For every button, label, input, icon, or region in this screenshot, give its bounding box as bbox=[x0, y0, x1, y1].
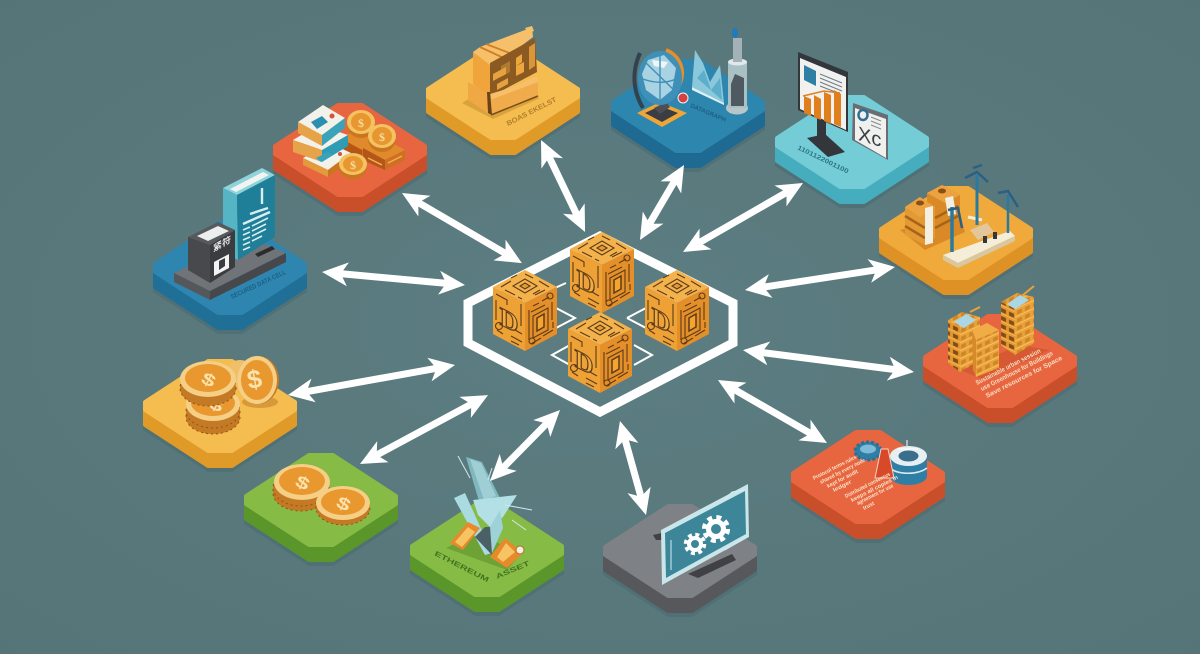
label: platform caption: BOAS EKELST bbox=[506, 96, 559, 128]
blockchain cube: top: D bbox=[577, 263, 595, 301]
panel: ledger book and terminal bbox=[153, 168, 307, 334]
arrow: documents to hub bbox=[712, 370, 833, 453]
arrow: vault to hub bbox=[530, 135, 596, 237]
icon: score card: Xc bbox=[858, 122, 881, 152]
icon: tower left bbox=[948, 307, 980, 372]
arrow: dashboard to hub bbox=[677, 173, 809, 262]
icon: gold coins: $ bbox=[350, 158, 356, 172]
icon: striped wheel bbox=[890, 440, 927, 485]
blockchain cube: bottom: D bbox=[575, 343, 593, 381]
icon: monitor with chart bbox=[798, 52, 848, 157]
label: platform text: kept for audit bbox=[826, 469, 859, 490]
icon: orange boxes bbox=[340, 128, 405, 170]
panel: globe and analytics bbox=[611, 28, 765, 172]
blockchain cube: left: D bbox=[500, 301, 518, 339]
arrow: broken glass to hub bbox=[481, 402, 569, 489]
label: platform text: use Greenhouse for Buildings bbox=[980, 350, 1054, 393]
arrow: two coins to hub bbox=[354, 385, 494, 475]
panel: wind energy and blocks bbox=[879, 165, 1033, 299]
icon: gold coins bbox=[339, 110, 396, 179]
icon: single coin bbox=[316, 486, 370, 525]
arrow: coin pile to hub bbox=[286, 353, 457, 407]
icon: score card bbox=[852, 103, 888, 160]
icon: single coin: $ bbox=[333, 493, 354, 516]
label: platform text: ledger bbox=[832, 479, 854, 494]
icon: stacked blocks bbox=[905, 185, 960, 245]
label: platform text: Sustainable urban session bbox=[975, 348, 1042, 387]
icon: terminal box bbox=[188, 222, 235, 283]
label: platform text: shared by every node bbox=[819, 458, 866, 486]
label: platform text: keeps all copies in bbox=[850, 475, 900, 504]
icon: gold coins: $ bbox=[379, 130, 385, 144]
icon: tower right bbox=[1001, 286, 1034, 355]
arrow: records to hub bbox=[396, 183, 528, 273]
icon: stacked books bbox=[293, 105, 351, 177]
icon: orange blocks bbox=[450, 522, 524, 568]
arrow: settings to hub bbox=[608, 418, 658, 518]
icon: tower middle bbox=[972, 323, 999, 377]
panel: dashboard monitor bbox=[775, 52, 929, 208]
label: platform text: agreement for use bbox=[856, 483, 895, 507]
arrow: globe to hub bbox=[630, 159, 694, 246]
icon: red cone bbox=[875, 449, 894, 478]
icon: orange block building bbox=[468, 26, 538, 115]
label: platform text: trust bbox=[862, 501, 876, 512]
label: platform text: Save resources for Space bbox=[985, 355, 1064, 400]
icon: test tube bbox=[726, 28, 748, 114]
blockchain cube: right: D bbox=[652, 301, 670, 339]
icon: blue gear bbox=[855, 442, 881, 460]
blockchain cube: top bbox=[570, 232, 634, 313]
panel: broken glass bbox=[410, 456, 564, 616]
blockchain cube: left bbox=[493, 270, 557, 351]
panel: vault building bbox=[426, 26, 580, 159]
icon: upper coin stack bbox=[180, 361, 236, 406]
arrow: terminal to hub bbox=[321, 260, 466, 297]
panel: coin pile bbox=[143, 356, 297, 472]
label: platform caption: ETHEREUM bbox=[433, 551, 490, 584]
panel: city buildings bbox=[923, 286, 1077, 427]
icon: lower coin stack: $ bbox=[206, 394, 227, 417]
label: platform caption small: ASSET bbox=[495, 560, 532, 581]
panel: settings screen bbox=[603, 484, 757, 617]
icon: terminal box: 紧符 bbox=[213, 234, 231, 255]
panel: documents and gears bbox=[791, 432, 945, 543]
icon: coin stack bbox=[273, 464, 330, 511]
label: platform text: Protocol terms rules bbox=[812, 455, 858, 482]
label: platform text: Distributed consensus bbox=[844, 472, 891, 500]
label: platform caption: SECURED DATA CELL bbox=[230, 269, 287, 301]
label: platform text bbox=[812, 455, 900, 512]
panel: two coins bbox=[244, 455, 398, 566]
arrow: wind energy to hub bbox=[743, 255, 897, 302]
icon: shattered crystal bbox=[454, 456, 532, 555]
icon: monitor with gears bbox=[661, 484, 749, 585]
icon: lower coin stack bbox=[186, 387, 240, 434]
icon: gold coins: $ bbox=[358, 116, 364, 130]
icon: globe on stand bbox=[634, 50, 688, 127]
icon: standing coin: $ bbox=[245, 363, 265, 395]
icon: area chart panel bbox=[692, 50, 724, 105]
blockchain cube: right bbox=[645, 270, 709, 351]
panel: records and coins bbox=[273, 105, 427, 216]
icon: white base with pylons bbox=[943, 165, 1018, 268]
arrow: city to hub bbox=[741, 338, 916, 384]
icon: teal book bbox=[223, 168, 275, 260]
icon: coin stack: $ bbox=[292, 472, 313, 495]
blockchain cube: bottom bbox=[568, 312, 632, 393]
label: platform caption: 1101122001100 bbox=[796, 145, 850, 176]
central hexagon frame bbox=[468, 236, 733, 412]
label: platform caption: DATAGRAPH bbox=[689, 103, 727, 124]
icon: upper coin stack: $ bbox=[198, 369, 219, 392]
icon: standing coin bbox=[226, 356, 279, 404]
